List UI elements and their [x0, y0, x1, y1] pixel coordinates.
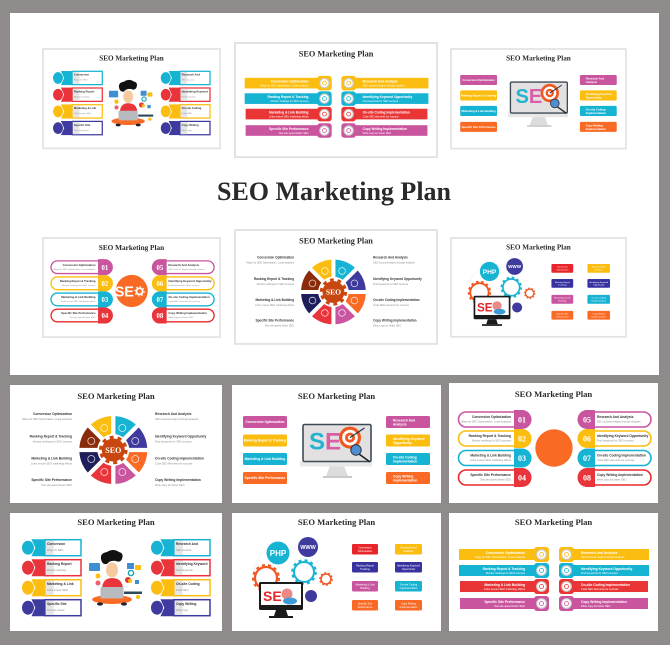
slide title: SEO Marketing Plan	[298, 391, 375, 401]
left bars: Specific Site Performance	[269, 127, 309, 131]
right labels: Copy Writing Implementation	[155, 478, 201, 482]
left boxes: Marketing & Link	[355, 582, 375, 586]
gears illustration	[469, 258, 535, 326]
monitor illustration: S	[515, 86, 529, 108]
right bars: Copy Writing Implementation	[363, 127, 407, 131]
right boxes: On-site Coding	[586, 108, 606, 112]
SEO wheel: SEO	[105, 446, 121, 455]
left rows: Ranking Report	[74, 89, 94, 93]
left labels: Marketing & Link Building	[31, 456, 72, 460]
right rows	[151, 539, 210, 616]
left boxes	[551, 264, 573, 320]
left rows: Marketing & Link	[47, 582, 74, 586]
thumbnail: character slide, top left	[43, 49, 220, 148]
left pills: 04	[101, 313, 109, 320]
left boxes	[243, 416, 287, 484]
left labels: Test site speed better SEO	[41, 483, 72, 487]
slide title: SEO Marketing Plan	[515, 517, 592, 527]
main white panel	[10, 13, 659, 375]
right boxes: Implementation	[400, 605, 418, 609]
right bars: Copy Writing Implementation	[581, 600, 627, 604]
left pills: Links ensure SEO marketing efforts	[470, 458, 512, 462]
left bars: Marketing & Link Building	[484, 583, 525, 587]
gears illustration: WWW	[508, 264, 522, 269]
left boxes: Building	[558, 301, 567, 303]
SEO wheel: SEO	[326, 288, 341, 297]
right pills: Find keywords for SEO success	[168, 284, 200, 287]
left boxes: Performance	[358, 605, 373, 609]
left bars: Ways for SEO Optimization. Local analytics	[260, 85, 309, 88]
right labels: Identifying Keyword Opportunity	[373, 277, 422, 281]
right bars: SEO success begins through analysis	[581, 555, 625, 559]
left boxes: Building	[360, 586, 370, 590]
thumbnail: pills slide with SEO circle, lower left	[43, 238, 220, 337]
right boxes: Analysis	[404, 549, 414, 553]
left pills: Test site speed better SEO	[480, 478, 511, 482]
left labels: Monitor rankings for SEO success	[33, 440, 73, 444]
left boxes: Tracking	[360, 567, 370, 571]
left pills: 01	[101, 265, 109, 272]
right boxes: Identifying Keyword	[589, 281, 609, 284]
left boxes: Ranking Report & Tracking	[244, 439, 286, 443]
SEO wheel	[301, 260, 366, 324]
right pills: On-site Coding Implementation	[597, 454, 646, 458]
right boxes: Implementation	[591, 316, 607, 319]
left rows: Test site speed	[47, 608, 65, 612]
left boxes: Specific Site Performance	[245, 476, 286, 480]
right bars: Write copy for better SEO	[363, 132, 391, 135]
left labels	[22, 412, 73, 487]
left labels: Conversion Optimization	[33, 412, 72, 416]
left boxes: Marketing & Link Building	[245, 457, 285, 461]
left pills: Ways for SEO Optimization. Local analytics	[53, 268, 96, 271]
left pills: 03	[101, 297, 109, 304]
right boxes: Implementation	[586, 111, 606, 115]
right pills	[578, 410, 651, 487]
left bars: Conversion Optimization	[486, 551, 525, 555]
left boxes: Ranking Report	[555, 281, 570, 284]
right pills: 07	[157, 297, 164, 304]
left bars: Specific Site Performance	[484, 600, 525, 604]
thumbnail: wheel slide, lower centre	[235, 230, 437, 344]
left bars: Conversion Optimization	[271, 80, 309, 84]
right boxes: Research And	[400, 546, 417, 550]
monitor illustration: S	[309, 428, 325, 456]
left pills: Specific Site Performance	[470, 473, 511, 477]
right pills: 05	[583, 416, 591, 424]
left rows: Specific Site	[47, 602, 67, 606]
gears illustration: WWW	[300, 545, 317, 551]
right boxes: Opportunity	[393, 441, 412, 445]
right boxes: Identifying Keyword	[397, 564, 420, 568]
left boxes: Specific Site	[358, 602, 373, 606]
thumbnail: PHP gears slide, lower right	[451, 238, 626, 337]
left labels: Ways for SEO Optimization. Local analytics	[22, 417, 73, 421]
right bars: Code SEO elements for success	[363, 116, 400, 119]
right rows: Research And	[176, 542, 198, 546]
left pills: 03	[518, 454, 526, 463]
right pills: 05	[157, 265, 164, 272]
left pills: Marketing & Link Building	[470, 454, 511, 458]
left rows: Links ensure SEO	[47, 588, 68, 592]
right boxes: Implementation	[393, 460, 417, 464]
right rows: Identifying Keyword	[182, 89, 208, 93]
slide title: SEO Marketing Plan	[77, 391, 155, 401]
right boxes	[395, 544, 422, 610]
left rows: Ranking Report	[47, 562, 72, 566]
right pills: On-site Coding Implementation	[168, 295, 210, 299]
right labels: Research And Analysis	[155, 412, 192, 416]
right rows: Write copy	[182, 129, 193, 132]
thumbnail: bars slide, top centre	[235, 43, 437, 157]
right pills	[152, 259, 214, 324]
left boxes: Marketing & Link Building	[462, 109, 496, 113]
left boxes: Ranking Report & Tracking	[461, 93, 497, 97]
left rows: Links ensure SEO	[74, 112, 92, 115]
slide title: SEO Marketing Plan	[506, 244, 571, 252]
right labels: Write copy for better SEO	[155, 483, 185, 487]
slide: PHP gears, row 2 centre	[232, 513, 441, 631]
left boxes: Tracking	[558, 284, 567, 287]
left boxes: Performance	[556, 316, 569, 319]
centre orange circle	[535, 429, 573, 467]
right labels: SEO success begins through analysis	[373, 261, 415, 264]
right boxes: Opportunity	[586, 95, 602, 99]
right boxes	[386, 416, 430, 484]
right pills: Identifying Keyword Opportunity	[597, 434, 648, 438]
right pills: 07	[583, 454, 591, 463]
right rows: Identifying Keyword	[176, 562, 208, 566]
left boxes: Conversion Optimization	[245, 420, 285, 424]
right bars: SEO success begins through analysis	[363, 85, 405, 88]
right boxes: Research And	[586, 77, 604, 81]
right pills: 06	[157, 281, 164, 288]
left rows: Test site speed	[74, 129, 89, 132]
left bars: Monitor rankings for SEO success	[486, 571, 526, 575]
right boxes: Copy Writing	[393, 474, 413, 478]
left bars: Marketing & Link Building	[269, 111, 309, 115]
right rows: Code SEO	[182, 113, 192, 115]
left labels: Specific Site Performance	[256, 318, 294, 322]
left labels: Conversion Optimization	[257, 256, 294, 260]
left boxes: Ranking Report	[356, 564, 374, 568]
right labels: Code SEO elements for success	[155, 462, 193, 466]
left pills: Monitor rankings for SEO success	[472, 438, 512, 442]
gears illustration: SE	[263, 588, 282, 604]
left pills: Specific Site Performance	[61, 311, 96, 315]
left pills: Conversion Optimization	[63, 263, 96, 267]
left rows: Specific Site	[74, 123, 91, 127]
left pills: Ways for SEO Optimization. Local analytics	[461, 420, 512, 424]
left pills: Monitor rankings for SEO success	[62, 284, 96, 287]
right pills: Write copy for better SEO	[597, 478, 627, 482]
right boxes: Implementation	[400, 586, 418, 590]
left rows: Conversion	[47, 542, 65, 546]
right boxes: On-site Coding	[393, 456, 417, 460]
gears illustration: SE	[477, 302, 493, 315]
left bars: Test site speed better SEO	[494, 604, 525, 608]
right boxes: Implementation	[591, 300, 607, 303]
right boxes: Opportunity	[593, 284, 605, 287]
right boxes: Analysis	[393, 422, 407, 426]
left pills	[458, 410, 532, 487]
left labels: Links ensure SEO marketing efforts	[31, 462, 73, 466]
right boxes	[580, 75, 617, 132]
right boxes: Identifying Keyword	[586, 92, 612, 96]
left boxes: Optimization	[556, 269, 569, 272]
right pills: Research And Analysis	[597, 415, 634, 419]
right boxes: Copy Writing	[593, 313, 606, 316]
right boxes: Implementation	[393, 478, 417, 482]
left labels: Ranking Report & Tracking	[30, 434, 72, 438]
right pills: 08	[583, 474, 591, 482]
right labels	[373, 256, 422, 327]
right pills: 06	[583, 434, 591, 444]
right bars: Research And Analysis	[581, 551, 618, 555]
right rows: On-site Coding	[176, 582, 200, 586]
right pills: 08	[157, 313, 164, 320]
right bars: Find keywords for SEO success	[581, 571, 618, 575]
left bars: Ranking Report & Tracking	[268, 95, 309, 99]
left boxes: Conversion Optimization	[462, 78, 495, 82]
left bars	[459, 547, 549, 611]
slide: character, row 2 left	[10, 513, 222, 631]
left pills: Test site speed better SEO	[69, 316, 96, 319]
right rows: Code SEO	[176, 588, 188, 592]
left bars: Monitor rankings for SEO success	[271, 100, 309, 103]
left boxes	[460, 75, 497, 132]
right boxes: Identifying Keyword	[393, 437, 425, 441]
left rows: Marketing & Link	[74, 106, 97, 110]
right labels: Copy Writing Implementation	[373, 318, 417, 322]
slide: wheel, row 1 left	[10, 385, 222, 503]
slide title: SEO Marketing Plan	[298, 517, 375, 527]
right bars	[559, 547, 649, 611]
gears illustration: PHP	[483, 269, 497, 276]
right labels: Identifying Keyword Opportunity	[155, 434, 206, 438]
left rows: Monitor rankings	[74, 95, 90, 98]
slide title: SEO Marketing Plan	[515, 389, 592, 399]
right pills: Identifying Keyword Opportunity	[168, 279, 212, 283]
right rows: Research And	[182, 73, 200, 77]
left rows: Ways for SEO	[74, 79, 88, 82]
slide title: SEO Marketing Plan	[299, 50, 374, 59]
left rows: Ways for SEO	[47, 548, 63, 552]
right rows: Find keywords	[176, 568, 193, 572]
character illustration	[89, 550, 142, 606]
right rows: Find keywords	[182, 95, 196, 98]
left pills: 01	[518, 416, 526, 424]
right rows: Write copy	[176, 608, 189, 612]
right rows: SEO success	[182, 80, 195, 82]
left labels	[247, 256, 295, 327]
left boxes: Conversion	[557, 266, 569, 269]
right rows: On-site Coding	[182, 106, 202, 110]
right rows: Copy Writing	[176, 602, 196, 606]
left labels: Ways for SEO Optimization. Local analytics	[247, 261, 295, 264]
left rows	[53, 71, 102, 135]
left bars: Links ensure SEO marketing efforts	[484, 587, 526, 591]
left bars: Links ensure SEO marketing efforts	[269, 116, 309, 119]
right boxes: Analysis	[586, 80, 598, 84]
monitor illustration: E	[529, 86, 542, 108]
right boxes: Analysis	[595, 269, 603, 272]
slide: bars, row 2 right	[449, 513, 658, 631]
slide title: SEO Marketing Plan	[99, 244, 164, 252]
right labels: Write copy for better SEO	[373, 324, 401, 327]
left bars: Test site speed better SEO	[279, 132, 309, 135]
right boxes: Opportunity	[402, 567, 416, 571]
centre SEO circle: SE	[115, 284, 134, 300]
right boxes: On-site Coding	[592, 297, 607, 300]
right rows: SEO success	[176, 548, 192, 552]
left boxes	[352, 544, 378, 610]
monitor illustration	[300, 424, 372, 478]
right bars: Write copy for better SEO	[581, 604, 611, 608]
slide title: SEO Marketing Plan	[506, 55, 571, 63]
thumbnail: monitor slide, top right	[451, 49, 626, 149]
left pills: Ranking Report & Tracking	[60, 279, 96, 283]
left pills: 02	[518, 434, 526, 444]
left pills: 04	[518, 474, 526, 482]
slide title: SEO Marketing Plan	[99, 55, 164, 63]
right labels: Find keywords for SEO success	[373, 283, 409, 286]
right labels: Research And Analysis	[373, 256, 408, 260]
right boxes: On-site Coding	[400, 582, 418, 586]
right bars	[341, 76, 428, 138]
slide title: SEO Marketing Plan	[77, 517, 155, 527]
right boxes: Research And	[592, 266, 606, 269]
right pills: Research And Analysis	[168, 263, 200, 267]
left labels: Ranking Report & Tracking	[254, 277, 294, 281]
right bars: Find keywords for SEO success	[363, 100, 399, 103]
right pills: Code SEO elements for success	[168, 300, 201, 303]
left bars: Ways for SEO Optimization. Local analytics	[475, 555, 526, 559]
right bars: Code SEO elements for success	[581, 587, 619, 591]
left boxes: Conversion	[358, 546, 372, 550]
right bars: On-site Coding Implementation	[363, 111, 410, 115]
left boxes: Optimization	[358, 549, 373, 553]
left labels: Monitor rankings for SEO success	[257, 283, 295, 286]
left pills: Marketing & Link Building	[61, 295, 96, 299]
slide: monitor, row 1 centre	[232, 385, 441, 503]
left labels: Specific Site Performance	[31, 478, 72, 482]
SEO wheel	[79, 416, 147, 484]
right boxes: Research And	[393, 418, 415, 422]
left bars	[245, 76, 332, 138]
right labels: SEO success begins through analysis	[155, 417, 199, 421]
left pills: Conversion Optimization	[472, 415, 511, 419]
left boxes: Specific Site	[556, 313, 569, 316]
left rows: Conversion	[74, 73, 89, 77]
right labels: Find keywords for SEO success	[155, 440, 192, 444]
gears illustration	[253, 537, 332, 618]
left labels: Test site speed better SEO	[265, 324, 294, 327]
right boxes: Implementation	[586, 127, 606, 131]
right labels: On-site Coding Implementation	[373, 298, 420, 302]
right boxes: Copy Writing	[586, 123, 603, 127]
right boxes	[587, 264, 610, 320]
main title: SEO Marketing Plan	[217, 177, 452, 206]
character illustration	[109, 80, 153, 126]
gears illustration: PHP	[270, 549, 287, 558]
right labels: On-site Coding Implementation	[155, 456, 204, 460]
right pills: Copy Writing Implementation	[168, 311, 207, 315]
right pills: Find keywords for SEO success	[597, 438, 634, 442]
right bars: Identifying Keyword Opportunity	[581, 567, 632, 571]
right rows	[161, 71, 210, 135]
right labels: Code SEO elements for success	[373, 304, 410, 307]
right pills: Copy Writing Implementation	[597, 473, 643, 477]
right pills: Write copy for better SEO	[168, 316, 194, 319]
monitor illustration: E	[325, 428, 341, 456]
left rows	[22, 539, 81, 616]
left pills: 02	[101, 281, 109, 288]
monitor illustration	[508, 82, 568, 127]
left boxes: Specific Site Performance	[462, 125, 496, 129]
left bars: Ranking Report & Tracking	[483, 567, 525, 571]
slide: pills with empty circle, row 1 right	[449, 383, 658, 503]
right pills: SEO success begins through analysis	[168, 268, 206, 271]
left labels: Marketing & Link Building	[256, 298, 294, 302]
right pills: SEO success begins through analysis	[597, 420, 641, 424]
right bars: On-site Coding Implementation	[581, 583, 630, 587]
left boxes: Marketing & Link	[554, 297, 571, 300]
left pills: Ranking Report & Tracking	[469, 434, 511, 438]
right pills: Code SEO elements for success	[597, 458, 635, 462]
left pills	[51, 259, 113, 324]
centre SEO circle	[115, 275, 148, 307]
right boxes: Copy Writing	[401, 602, 416, 606]
right labels	[155, 412, 206, 487]
right rows: Copy Writing	[182, 123, 199, 127]
left pills: Links ensure SEO marketing efforts	[61, 300, 96, 303]
right bars: Identifying Keyword Opportunity	[363, 95, 412, 99]
slide title: SEO Marketing Plan	[299, 236, 373, 245]
left labels: Links ensure SEO marketing efforts	[255, 304, 295, 307]
left rows: Monitor rankings	[47, 568, 67, 572]
right bars: Research And Analysis	[363, 80, 398, 84]
